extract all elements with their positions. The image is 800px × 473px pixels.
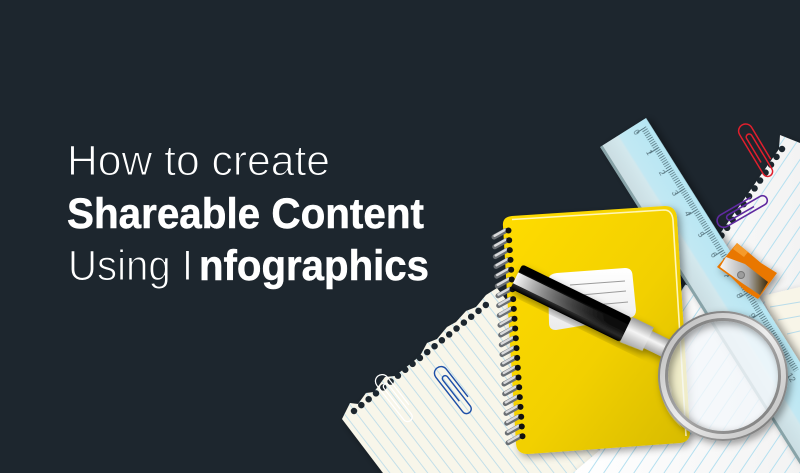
illustration: cream paper corner — [762, 287, 800, 380]
perforation holes — [683, 149, 782, 288]
ruler numbers: 12 — [785, 372, 797, 384]
notebook cover — [503, 206, 690, 454]
ruler numbers: 11 — [772, 352, 784, 364]
spiral binding — [494, 228, 526, 443]
title line: Using Infographics — [68, 242, 429, 290]
icon: red paper clip — [736, 121, 778, 178]
ruler numbers: 6 — [709, 251, 719, 260]
title line: Shareable Content: Shareable Content — [67, 190, 424, 238]
ruler numbers: 1 — [644, 148, 654, 157]
icon: blue paper clip — [432, 364, 476, 416]
notebook — [494, 206, 690, 454]
icon: orange pencil sharpener — [717, 243, 777, 299]
ruler numbers: 8 — [734, 291, 744, 300]
title line: Using Infographics: nfographics — [199, 242, 429, 290]
title line: How to create: How to create — [67, 137, 330, 185]
title — [67, 137, 429, 290]
illustration: white lined paper — [573, 135, 800, 473]
ruler — [600, 118, 800, 465]
ruler numbers: 0 — [631, 128, 642, 137]
ruler numbers: 2 — [657, 169, 667, 178]
ruler numbers: 7 — [721, 271, 732, 280]
magnifier lens — [665, 318, 781, 434]
title line: Using Infographics: Using I — [68, 242, 193, 290]
ruler numbers: 3 — [670, 189, 680, 198]
icon: purple paper clip — [715, 191, 769, 230]
ruler numbers — [631, 128, 797, 384]
ruler numbers: 9 — [747, 312, 757, 321]
major tick marks — [641, 130, 794, 373]
lens reflection — [660, 317, 758, 428]
notebook label — [548, 268, 636, 330]
perforation holes — [354, 300, 492, 411]
magnifier ring — [662, 316, 784, 436]
ruler numbers: 4 — [682, 209, 693, 218]
illustration: left torn notepaper — [342, 288, 640, 473]
ruler numbers: 5 — [696, 230, 706, 240]
ruler numbers: 10 — [759, 331, 772, 344]
magnifier handle — [510, 263, 672, 361]
icon: white paper clip — [373, 372, 417, 424]
magnifying glass — [510, 263, 784, 436]
minor tick marks — [643, 128, 796, 371]
